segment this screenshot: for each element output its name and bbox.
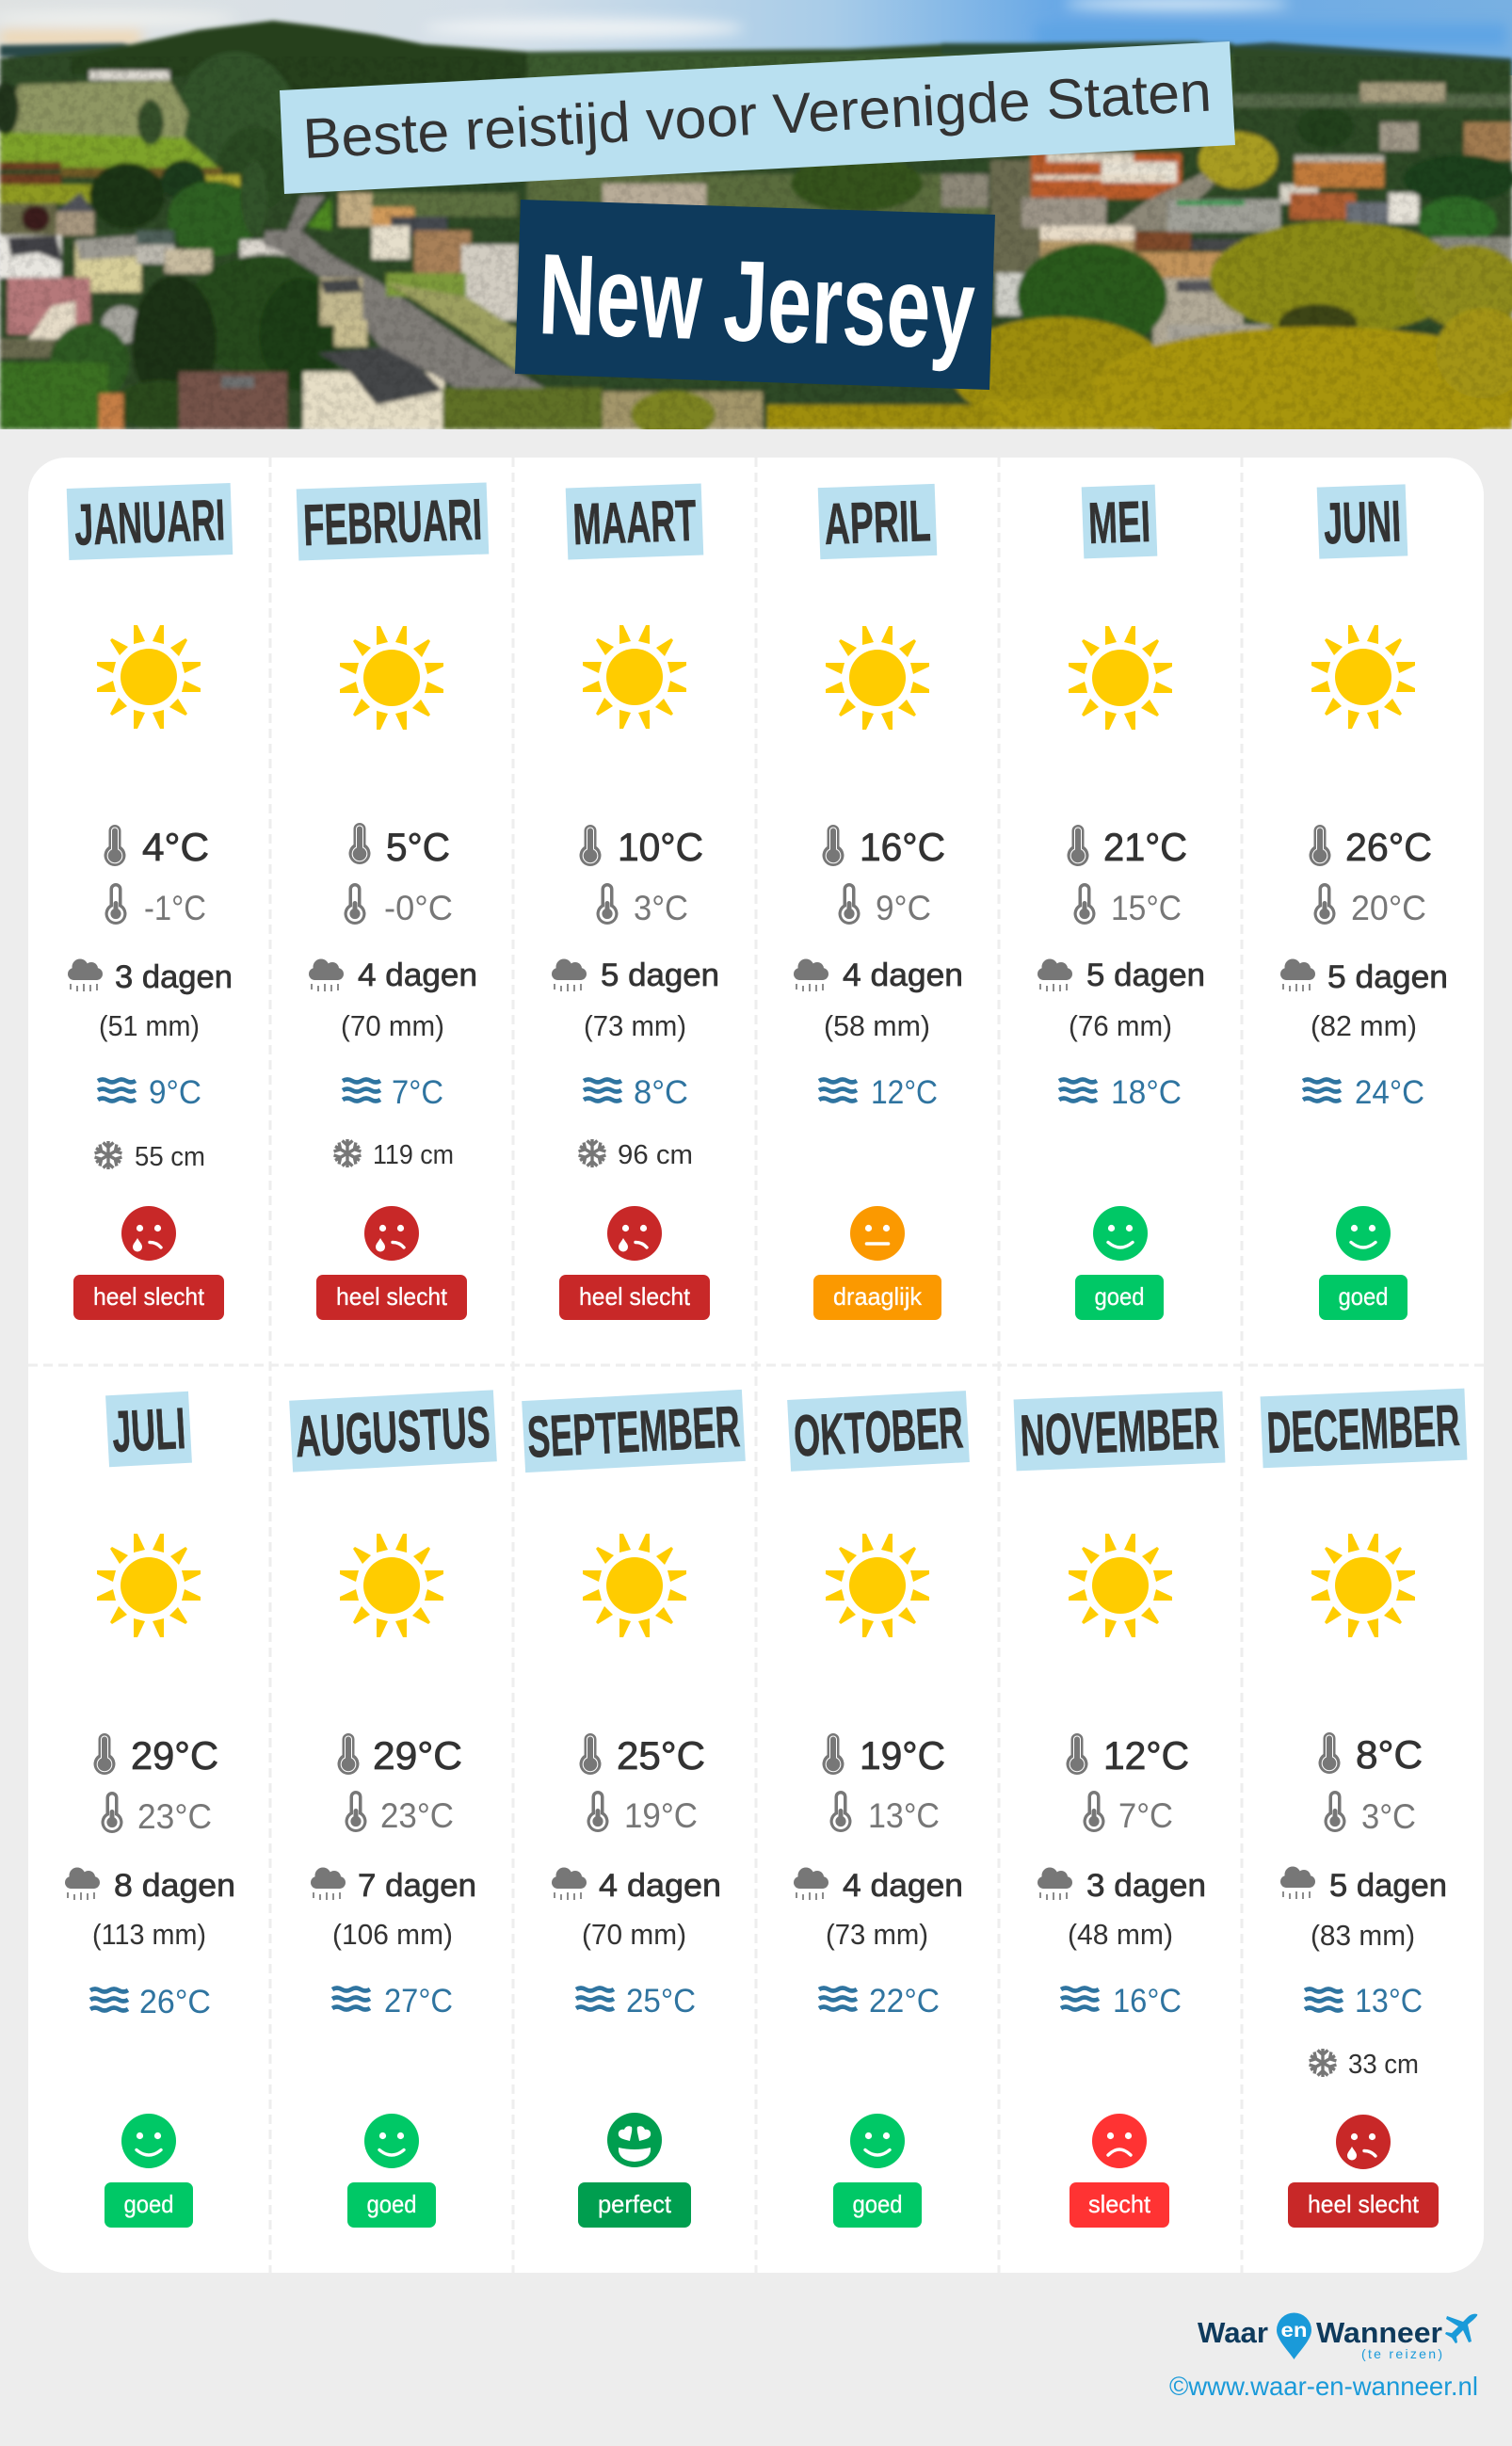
sea temperature: 27°C [384, 1983, 453, 2020]
rating badge: goed [853, 2190, 902, 2218]
sea temperature: 25°C [626, 1983, 696, 2020]
rain days: 7 dagen [358, 1868, 476, 1904]
title banner: New Jersey [515, 200, 995, 390]
high temperature: 5°C [386, 825, 450, 869]
rain days [1280, 958, 1448, 995]
high temperature [1318, 1732, 1423, 1777]
rainfall: (70 mm) [341, 1009, 444, 1042]
month label: JANUARI [73, 488, 226, 558]
rainfall: (83 mm) [1311, 1919, 1415, 1952]
rating face [1093, 1206, 1148, 1261]
icon: location pin [1277, 2312, 1311, 2359]
sea temperature: 8°C [634, 1074, 688, 1111]
rating face [121, 1206, 176, 1261]
sea temperature [98, 1074, 201, 1111]
heading banner: Beste reistijd voor Verenigde Staten: Beste reistijd voor Verenigde Staten [301, 60, 1213, 170]
rating face [364, 2114, 419, 2168]
month label [67, 483, 233, 560]
rating badge [316, 1275, 467, 1320]
high temperature: 21°C [1103, 825, 1187, 869]
sea temperature: 9°C [149, 1074, 201, 1111]
rain days [552, 957, 719, 993]
rating badge: goed [367, 2190, 416, 2218]
high temperature [823, 1733, 945, 1778]
rainfall: (113 mm) [92, 1918, 206, 1951]
icon: sun [826, 626, 929, 730]
low temperature: 3°C [634, 889, 688, 927]
high temperature [1068, 825, 1187, 869]
panel: augustus [289, 1390, 497, 2228]
rating badge [813, 1275, 941, 1320]
rating badge: goed [124, 2190, 173, 2218]
low temperature: 9°C [876, 889, 931, 927]
rain days: 8 dagen [114, 1868, 235, 1904]
icon: sun [1069, 1534, 1172, 1637]
rating badge: goed [1094, 1282, 1145, 1311]
high temperature: 8°C [1356, 1732, 1423, 1777]
icon: sun [97, 625, 201, 729]
rating badge [833, 2182, 922, 2228]
sea temperature: 24°C [1355, 1074, 1424, 1111]
month label [787, 1391, 970, 1472]
rain days: 4 dagen [843, 957, 963, 993]
rain days: 4 dagen [599, 1868, 721, 1904]
low temperature [1314, 883, 1426, 927]
rating badge: slecht [1088, 2190, 1151, 2218]
sea temperature: 18°C [1111, 1074, 1182, 1111]
rating badge: goed [1339, 1282, 1388, 1311]
sea temperature [90, 1984, 211, 2020]
rating badge [347, 2182, 436, 2228]
rainfall: (70 mm) [582, 1918, 686, 1951]
month label [818, 484, 937, 559]
rating badge: perfect [598, 2190, 672, 2218]
high temperature [94, 1733, 218, 1778]
high temperature [823, 825, 945, 869]
rating face [1336, 1206, 1391, 1261]
high temperature: 16°C [860, 825, 945, 869]
low temperature: 3°C [1361, 1797, 1416, 1836]
rating badge [1075, 1275, 1164, 1320]
panel: januari [67, 483, 233, 1320]
month label [105, 1392, 192, 1467]
rain days: 3 dagen [1086, 1868, 1206, 1904]
low temperature [345, 1791, 454, 1835]
title banner: New Jersey: New Jersey [537, 230, 977, 373]
low temperature [830, 1791, 940, 1835]
sea temperature: 22°C [869, 1983, 940, 2020]
month label [566, 484, 703, 559]
icon: sun [340, 1534, 443, 1637]
month label: NOVEMBER [1019, 1396, 1220, 1469]
rating badge [105, 2182, 193, 2228]
high temperature: 4°C [142, 825, 209, 869]
snow: 119 cm [373, 1140, 454, 1170]
low temperature [105, 883, 206, 927]
high temperature: 10°C [618, 825, 703, 869]
month label: MAART [571, 489, 698, 557]
sea temperature: 26°C [139, 1984, 211, 2020]
sea temperature [819, 1074, 938, 1111]
rain days: 5 dagen [601, 957, 719, 993]
month label: OKTOBER [792, 1395, 965, 1470]
rating face [607, 2113, 662, 2167]
rating badge: heel slecht [93, 1282, 205, 1311]
sea temperature [1059, 1074, 1182, 1111]
sea temperature [343, 1074, 443, 1111]
rain days: 3 dagen [115, 959, 233, 995]
rain days [552, 1868, 721, 1904]
low temperature: 15°C [1111, 889, 1182, 927]
rain days [65, 1868, 235, 1904]
sea temperature [1303, 1074, 1424, 1111]
low temperature: -0°C [384, 889, 453, 927]
rating badge: heel slecht [1308, 2190, 1420, 2218]
snow [1308, 2049, 1419, 2080]
rain days: 4 dagen [358, 957, 477, 993]
month label: JULI [110, 1396, 187, 1465]
low temperature: 19°C [624, 1796, 698, 1835]
icon: plane [1445, 2314, 1477, 2343]
rating badge [578, 2182, 691, 2228]
panel: oktober [787, 1391, 970, 2228]
rainfall: (51 mm) [99, 1009, 200, 1042]
low temperature [345, 883, 453, 927]
sea temperature [584, 1074, 688, 1111]
high temperature [104, 825, 209, 869]
low temperature [597, 883, 688, 927]
month label [522, 1390, 746, 1472]
high temperature [348, 823, 450, 869]
rain days [794, 1868, 963, 1904]
low temperature [1324, 1791, 1416, 1836]
low temperature [1073, 883, 1182, 927]
month label: JUNI [1323, 490, 1402, 556]
snow [577, 1139, 693, 1170]
rainfall: (73 mm) [826, 1918, 928, 1951]
rain days: 5 dagen [1327, 959, 1448, 995]
rating face [850, 2114, 905, 2168]
sea temperature [576, 1983, 696, 2020]
icon: sun [583, 625, 686, 729]
icon: sun [97, 1534, 201, 1637]
high temperature [1309, 825, 1432, 869]
low temperature [838, 883, 931, 927]
icon: sun [1311, 1534, 1415, 1637]
rain days [794, 957, 963, 993]
snow [332, 1139, 454, 1170]
high temperature: 29°C [373, 1733, 462, 1778]
rain days [1280, 1866, 1447, 1904]
month label [297, 482, 489, 561]
rating badge [73, 1275, 224, 1320]
logo: Waar en Wanneer: (te reizen) [1361, 2346, 1442, 2361]
low temperature [102, 1792, 212, 1836]
rating face [850, 1206, 905, 1261]
high temperature [580, 825, 703, 869]
panel: juni [1280, 484, 1448, 1320]
low temperature: 13°C [868, 1796, 940, 1835]
snow: 55 cm [135, 1142, 205, 1172]
low temperature [587, 1791, 698, 1835]
sea temperature [1061, 1983, 1182, 2020]
month label [1082, 485, 1157, 558]
icon: sun [1069, 626, 1172, 730]
hero photo: New Jersey town aerial view [0, 0, 1512, 449]
low temperature: 23°C [380, 1796, 454, 1835]
rain days [1037, 957, 1205, 993]
month label: MEI [1087, 490, 1151, 556]
month label: FEBRUARI [302, 488, 483, 558]
month label: APRIL [823, 489, 932, 557]
panel: december [1261, 1389, 1467, 2228]
high temperature: 25°C [617, 1733, 705, 1778]
sea temperature: 13°C [1355, 1983, 1423, 2020]
panel: juli [65, 1392, 235, 2228]
sea temperature: 7°C [392, 1074, 443, 1111]
sea temperature: 12°C [871, 1074, 938, 1111]
high temperature: 29°C [131, 1733, 218, 1778]
rainfall: (58 mm) [824, 1009, 930, 1042]
low temperature: -1°C [144, 889, 206, 927]
icon: sun [1311, 625, 1415, 729]
high temperature: 19°C [860, 1733, 945, 1778]
heading banner: Beste reistijd voor Verenigde Staten [280, 41, 1235, 194]
rain days [1037, 1868, 1206, 1904]
rain days: 5 dagen [1086, 957, 1205, 993]
rating face [121, 2114, 176, 2168]
rain days: 4 dagen [843, 1868, 963, 1904]
panel: mei [1037, 485, 1205, 1320]
snow [93, 1141, 205, 1172]
low temperature: 7°C [1118, 1796, 1173, 1835]
rating face [364, 1206, 419, 1261]
rating badge [1288, 2182, 1439, 2228]
icon: sun [340, 626, 443, 730]
rating face [1092, 2114, 1147, 2168]
low temperature: 23°C [137, 1797, 212, 1836]
high temperature [1066, 1733, 1189, 1778]
logo: Waar en Wanneer: Waar [1198, 2316, 1268, 2349]
rainfall: (73 mm) [584, 1009, 686, 1042]
rainfall: (82 mm) [1311, 1009, 1417, 1042]
rating badge: draaglijk [833, 1282, 923, 1311]
snow: 33 cm [1348, 2050, 1419, 2080]
rainfall: (48 mm) [1068, 1918, 1173, 1951]
logo: Waar en Wanneer [1198, 2312, 1477, 2361]
rating badge [1070, 2182, 1169, 2228]
rating face [1336, 2115, 1391, 2169]
high temperature: 26°C [1345, 825, 1432, 869]
month label [1317, 484, 1407, 559]
rating badge: heel slecht [579, 1282, 691, 1311]
month label: SEPTEMBER [525, 1394, 742, 1471]
snow: 96 cm [618, 1140, 693, 1170]
panel: climate table card [28, 458, 1484, 2273]
rain days [68, 958, 233, 995]
sea temperature [1305, 1983, 1423, 2020]
rain days [311, 1868, 476, 1904]
icon: location pin: en [1280, 2320, 1307, 2341]
month label: AUGUSTUS [294, 1395, 491, 1470]
panel: april [794, 484, 963, 1320]
rating face [607, 1206, 662, 1261]
sea temperature: 16°C [1113, 1983, 1182, 2020]
logo: Waar en Wanneer: Wanneer [1316, 2316, 1442, 2349]
rainfall: (106 mm) [332, 1918, 453, 1951]
month label [289, 1390, 497, 1472]
low temperature [1083, 1791, 1173, 1835]
panel: maart [552, 484, 719, 1320]
panel: september [522, 1390, 746, 2228]
rain days [309, 957, 477, 993]
rain days: 5 dagen [1329, 1868, 1447, 1904]
low temperature: 20°C [1351, 889, 1426, 927]
website credit: ©www.waar-en-wanneer.nl [1169, 2372, 1478, 2401]
rainfall: (76 mm) [1069, 1009, 1172, 1042]
month label [1014, 1392, 1225, 1471]
high temperature: 12°C [1103, 1733, 1189, 1778]
icon: sun [826, 1534, 929, 1637]
rating badge [1319, 1275, 1407, 1320]
icon: sun [583, 1534, 686, 1637]
sea temperature [819, 1983, 940, 2020]
rating badge [559, 1275, 710, 1320]
rating badge: heel slecht [336, 1282, 448, 1311]
panel: november [1014, 1392, 1225, 2228]
sea temperature [332, 1983, 453, 2020]
panel: februari [297, 482, 489, 1320]
